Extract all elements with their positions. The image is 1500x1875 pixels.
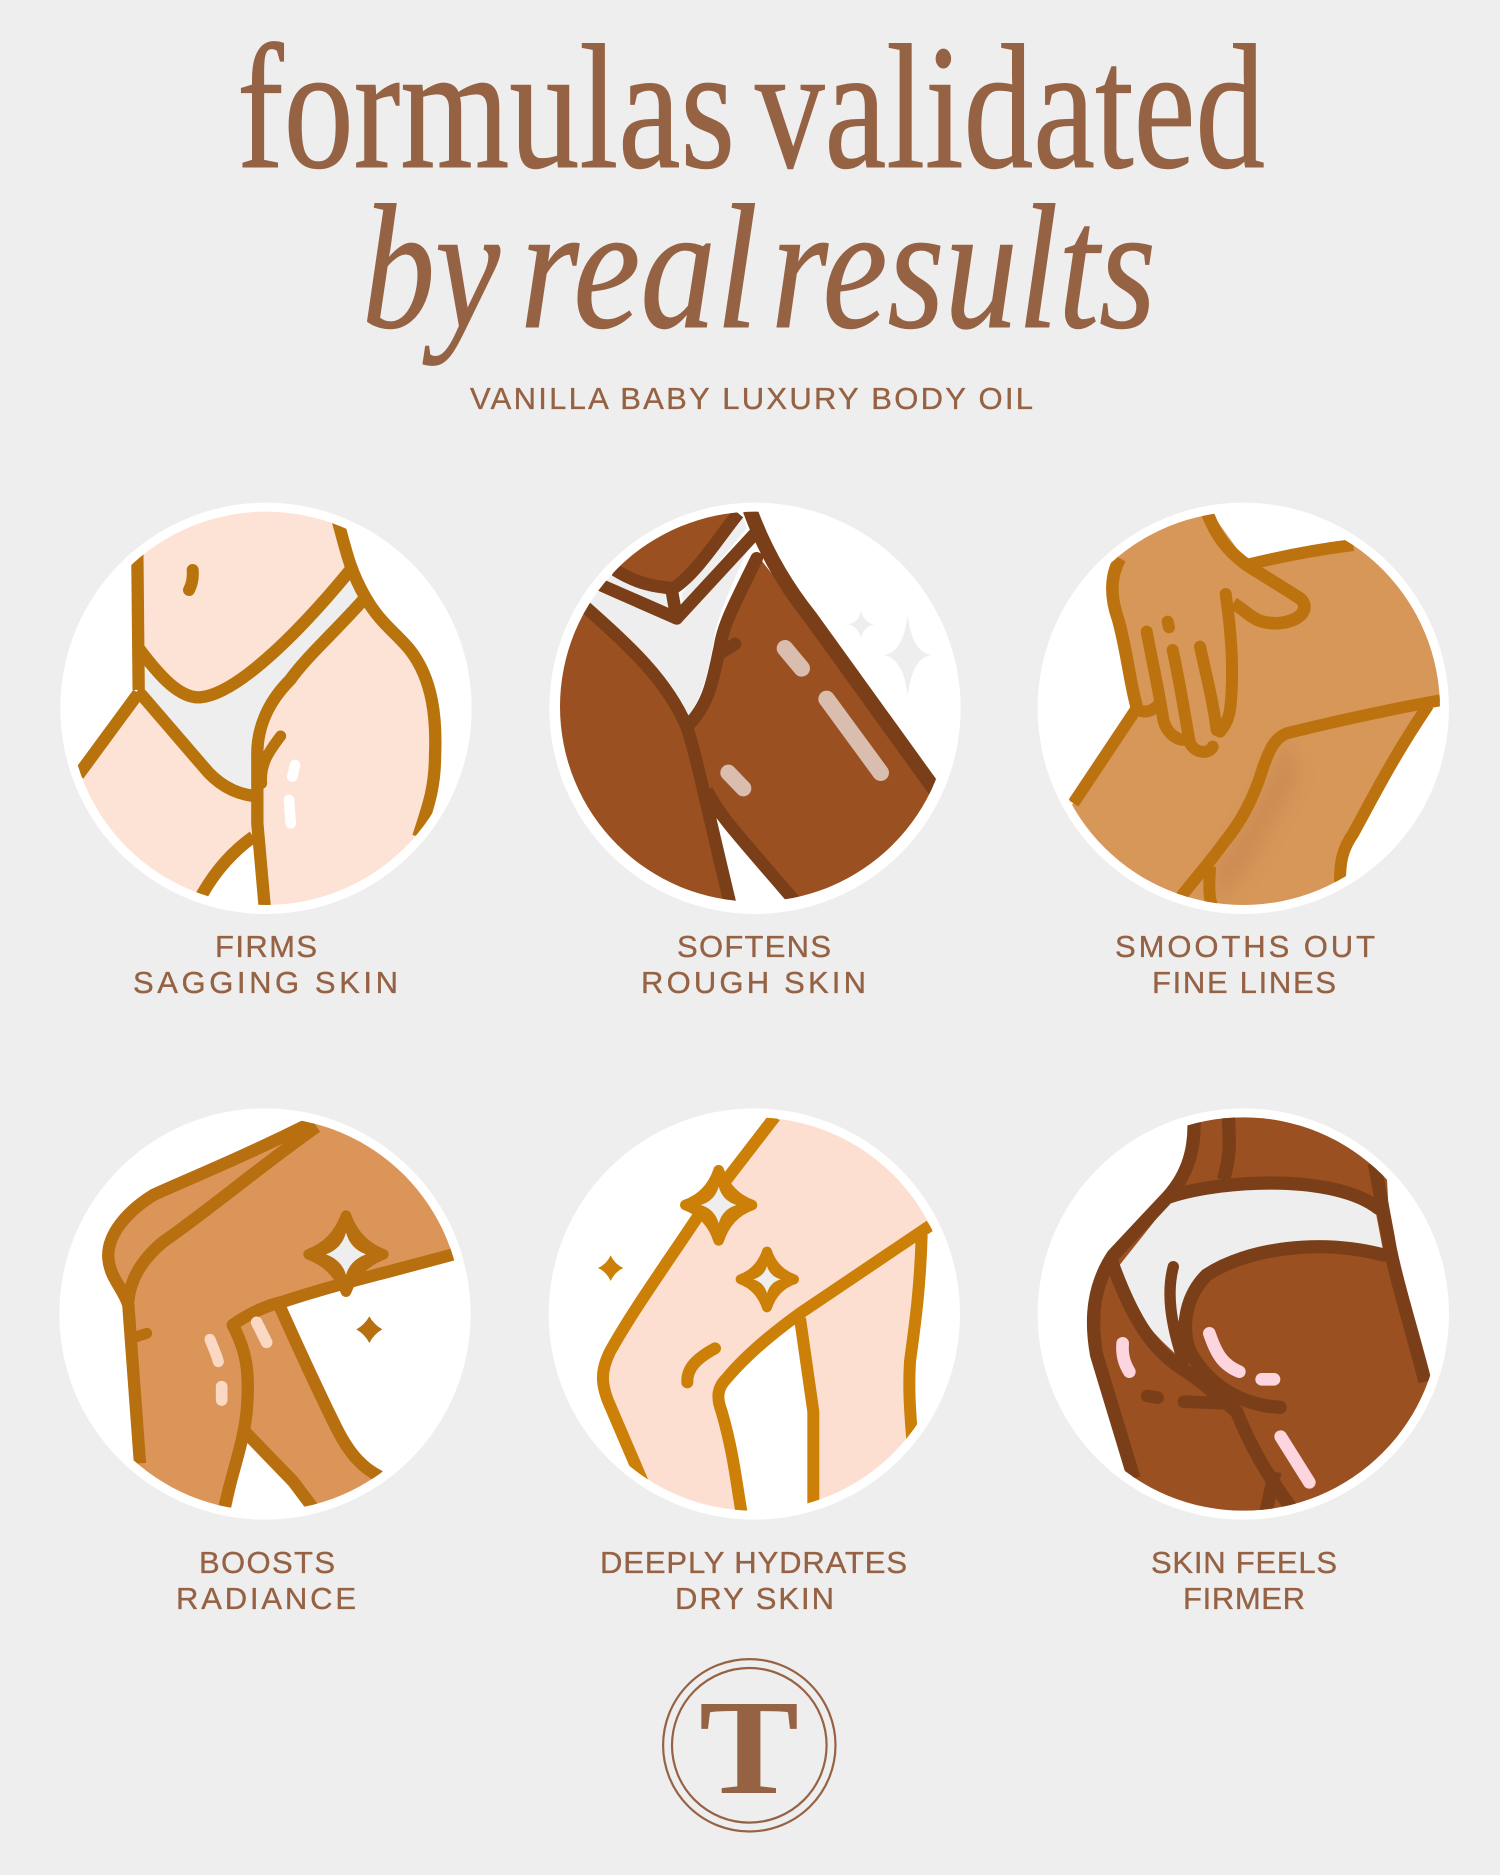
label: FINE LINES [1152, 965, 1336, 1000]
title [237, 8, 1265, 366]
logo [663, 1659, 836, 1832]
label: DRY SKIN [675, 1581, 834, 1616]
illustration: hand on thigh, medium skin [1038, 502, 1449, 914]
label: SMOOTHS OUT [1115, 929, 1375, 964]
panel: boosts radiance [59, 1108, 507, 1616]
icon: large sparkle [309, 1216, 383, 1292]
panel: skin feels firmer [1038, 1108, 1449, 1616]
label [133, 929, 398, 1000]
label: FIRMS [215, 929, 317, 964]
illustration: torso and hip, light skin [60, 503, 472, 923]
label [176, 1545, 356, 1616]
label: DEEPLY HYDRATES [600, 1545, 907, 1580]
label: BOOSTS [199, 1545, 335, 1580]
title: validated [755, 8, 1265, 206]
panel: smooths out fine lines [1038, 503, 1487, 1000]
label: SOFTENS [677, 929, 831, 964]
label: SAGGING SKIN [133, 965, 398, 1000]
label [1115, 929, 1375, 1000]
logo letter T: T [699, 1673, 799, 1823]
icon: medium sparkle [741, 1252, 794, 1307]
illustration: buttocks and waist, deep skin [1038, 1108, 1449, 1528]
label: RADIANCE [176, 1581, 356, 1616]
label [600, 1545, 907, 1616]
logo rings [663, 1659, 836, 1832]
icon: small sparkle [598, 1255, 623, 1281]
icon: small sparkle [356, 1316, 382, 1343]
panel: firms sagging skin [60, 503, 472, 1000]
label [1151, 1545, 1337, 1616]
label: ROUGH SKIN [641, 965, 866, 1000]
icon: large sparkle [685, 1170, 752, 1240]
label: SKIN FEELS [1151, 1545, 1337, 1580]
illustration: bent knee with sparkles, tan skin [60, 1108, 470, 1520]
panel: softens rough skin [549, 503, 963, 1000]
title: by [362, 168, 501, 366]
title: results [771, 168, 1156, 366]
title: real [520, 168, 758, 366]
label: FIRMER [1183, 1581, 1305, 1616]
panel: deeply hydrates dry skin [549, 1108, 997, 1616]
illustration: elbow with sparkles, light skin [548, 1108, 960, 1520]
label [641, 929, 866, 1000]
illustration: hip and thigh, deep skin [549, 503, 963, 914]
subtitle: VANILLA BABY LUXURY BODY OIL [470, 381, 1033, 416]
title: formulas [237, 8, 735, 206]
